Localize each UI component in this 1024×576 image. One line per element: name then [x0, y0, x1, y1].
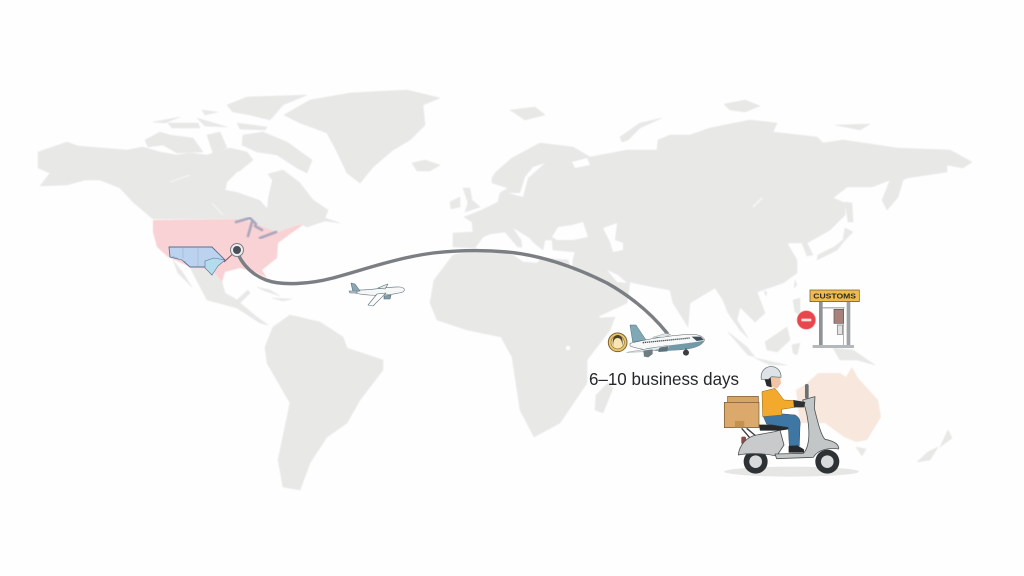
plane upper wing — [653, 333, 671, 337]
land: Iceland — [412, 160, 440, 171]
land: Madagascar — [595, 383, 613, 413]
rider hand and handlebar — [793, 400, 805, 407]
land: Borneo — [765, 327, 790, 352]
water: Persian Gulf — [607, 270, 627, 283]
rider shoe — [789, 445, 804, 453]
icon: customs booth — [797, 290, 859, 348]
scooter front leg shield — [775, 397, 839, 459]
land: Baja California — [173, 260, 192, 287]
land: Philippines — [793, 298, 800, 315]
plane cockpit — [692, 337, 704, 341]
land: Caribbean islands — [257, 287, 292, 301]
water: Black Sea — [552, 222, 588, 240]
no-entry sign — [797, 311, 816, 329]
water: Lake Victoria — [566, 346, 570, 350]
icon: small airplane mid-route — [349, 283, 404, 306]
plane engine — [643, 349, 653, 357]
internal state borders — [172, 247, 198, 266]
highlighted destination: Australia — [796, 367, 881, 442]
water: Hudson Bay — [227, 170, 272, 208]
icon: delivery scooter and rider — [724, 367, 859, 477]
rider head — [768, 375, 781, 388]
plane tail fin — [630, 325, 646, 342]
land: Japan and Sakhalin — [817, 202, 853, 260]
water: Canadian lakes — [170, 175, 223, 215]
land: Greenland — [284, 90, 440, 183]
plane wing — [627, 345, 670, 352]
land: Eurasia — [453, 120, 972, 338]
ground shadow — [724, 467, 859, 477]
land: Canadian Arctic islands — [145, 95, 312, 173]
water: Lake Baikal — [753, 198, 762, 207]
small red connector line — [224, 250, 237, 262]
land: Canada and Alaska — [38, 142, 340, 232]
inland water cut-outs — [170, 158, 762, 350]
land: Sumatra and Java — [728, 332, 787, 365]
land: Taiwan and Hainan — [764, 280, 797, 296]
icon: customs booth: CUSTOMS — [813, 292, 856, 301]
water: Baltic Sea — [508, 163, 545, 197]
delivery boxes — [728, 396, 758, 403]
shipping route curve — [237, 251, 667, 333]
land: Britain and Ireland — [450, 188, 480, 212]
highlighted origin: United States — [153, 219, 303, 282]
customs phone panel — [834, 309, 843, 323]
customs booth posts — [819, 302, 823, 346]
land: South America — [265, 315, 383, 490]
rider legs — [763, 414, 800, 446]
scooter seat — [759, 425, 788, 431]
world map: grey land — [38, 90, 972, 490]
Texas-shaped lighter area — [205, 258, 225, 275]
land: Tasmania — [856, 447, 866, 456]
front wheel — [815, 450, 839, 474]
land: Mexico and Central America — [190, 267, 268, 325]
land: Sulawesi and New Guinea — [792, 343, 875, 365]
scooter headlight and stem — [805, 384, 809, 399]
icon: large airplane — [627, 325, 704, 357]
plane lower body — [645, 341, 704, 351]
water: White Sea — [572, 158, 590, 168]
scooter rear body — [738, 430, 784, 456]
delivery time label: 6–10 business days — [589, 369, 739, 389]
rider torso — [762, 388, 795, 417]
plane fuselage — [630, 334, 704, 351]
plane landing gear — [684, 348, 687, 352]
origin marker — [230, 244, 244, 256]
Great Lakes — [236, 218, 276, 238]
land: Svalbard and Russian Arctic — [510, 100, 870, 142]
scooter tail light — [741, 437, 746, 444]
customs sign — [810, 290, 859, 302]
highlighted region: blue inset states — [169, 247, 237, 275]
plane windows — [643, 338, 690, 343]
land: Africa — [430, 250, 615, 437]
water: Caspian Sea — [603, 223, 623, 252]
rider helmet — [761, 367, 781, 379]
land: New Zealand — [917, 430, 952, 462]
rear rack — [742, 428, 757, 440]
rear wheel — [744, 450, 768, 474]
icon: coin — [608, 333, 627, 352]
